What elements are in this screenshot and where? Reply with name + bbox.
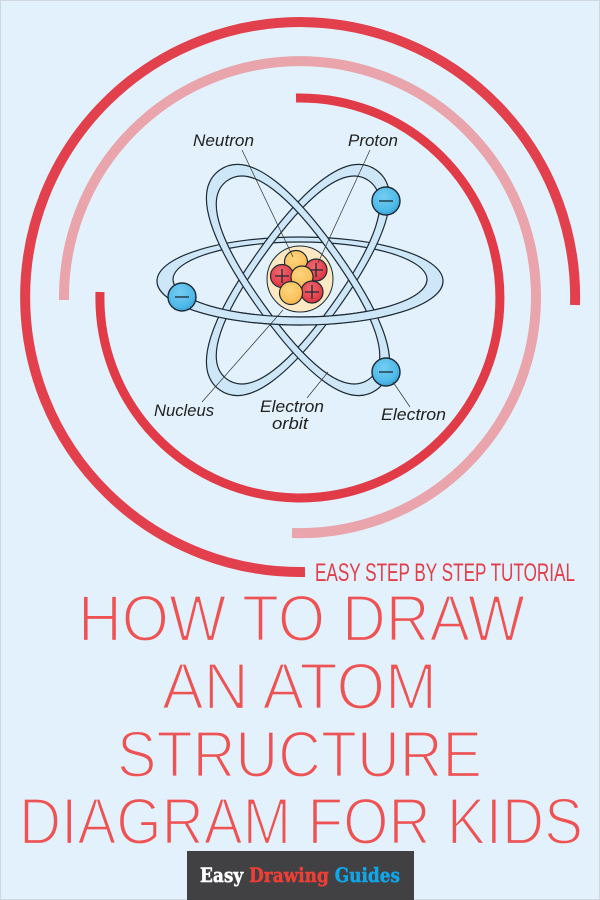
electron: bottom right (372, 358, 400, 386)
proton: left (270, 264, 294, 288)
label: Electron orbit: orbit (272, 414, 309, 433)
nucleus disc (267, 246, 333, 312)
title: STRUCTURE (117, 717, 482, 791)
leader lines (202, 150, 410, 407)
orbit: horizontal (157, 237, 443, 325)
title: AN ATOM (162, 649, 437, 723)
label: Electron orbit (260, 397, 324, 433)
atom diagram (157, 142, 443, 418)
label: Nucleus: Nucleus (154, 401, 214, 420)
neutron: centre (291, 266, 313, 288)
orbit: horizontal front section (156, 281, 444, 326)
label: Electron: Electron (381, 405, 446, 424)
proton: lower right (301, 281, 323, 303)
electron: left (168, 283, 196, 311)
ring: inner red arc (100, 98, 500, 498)
footer logo: Easy Drawing Guides (200, 863, 400, 887)
label: Electron orbit: Electron (260, 397, 324, 416)
proton: right (305, 259, 327, 281)
label: Neutron: Neutron (193, 131, 254, 150)
footer logo (187, 851, 414, 900)
title: HOW TO DRAW (78, 581, 526, 655)
electron: top right (372, 187, 400, 215)
label: Proton: Proton (348, 131, 398, 150)
orbit: tilted falling right (180, 142, 416, 418)
title (19, 581, 583, 858)
neutron: top (284, 250, 308, 274)
ring: middle pink arc (64, 61, 536, 533)
orbit: tilted rising right (180, 142, 416, 418)
neutron: lower left (280, 282, 302, 304)
ring: outer red arc (25, 22, 575, 572)
